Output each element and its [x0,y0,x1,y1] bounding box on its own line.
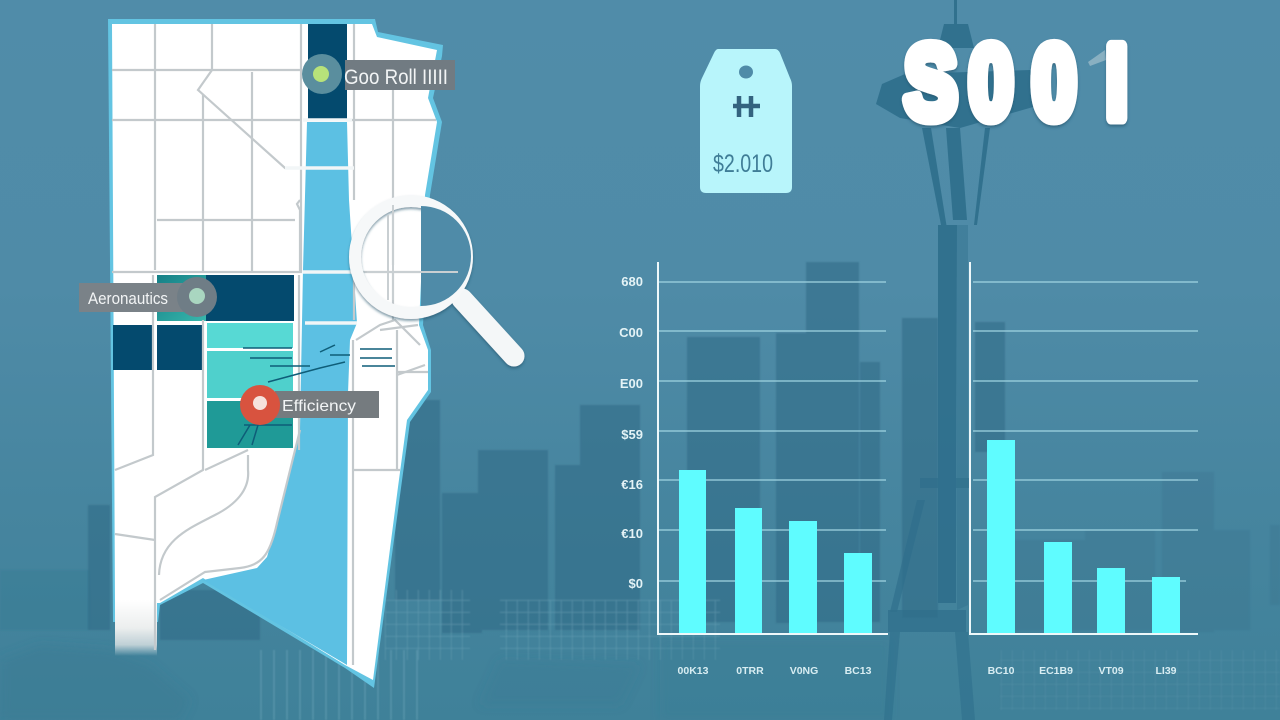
Space Needle silhouette [876,0,1106,720]
big headline: S00I [904,23,1128,141]
gridlines left [659,282,886,581]
x axis labels left: 0TRR [736,665,764,677]
tag hole [739,66,753,78]
y axis labels: C00 [619,325,643,340]
axes right [970,262,1198,634]
tag price: $2.010 [713,150,773,178]
tag hash icon [733,96,760,117]
x axis labels left [678,665,872,677]
y axis labels: $59 [621,427,643,442]
y axis labels: E00 [620,376,643,391]
white road over water [285,120,360,323]
bars right [987,440,1180,633]
map outline [108,19,443,688]
dark transit lines [238,345,395,445]
lens road lines [367,205,458,300]
axes left [658,262,888,634]
y axis labels: $0 [629,576,643,591]
label: top callout: Goo Roll IIIII [344,66,448,89]
label: red callout: Efficiency [282,398,356,415]
x axis labels right: BC10 [988,665,1015,677]
label: red callout [240,385,379,425]
bar chart left [619,262,888,677]
x axis labels right: VT09 [1098,665,1124,677]
street grid [112,24,436,665]
water channel [203,122,357,665]
y axis labels: 680 [621,274,643,289]
city skyline [0,262,1280,720]
magnifying glass [355,201,514,356]
x axis labels left: 00K13 [678,665,709,677]
x axis labels left: V0NG [790,665,818,677]
navy district top [308,24,347,119]
label: left callout [79,277,217,317]
x axis labels right: EC1B9 [1039,665,1073,677]
price tag [700,49,792,193]
fading south strip [115,600,157,656]
gridlines right [973,282,1198,581]
navy and teal districts [113,275,294,448]
y axis labels [619,274,643,591]
label: top callout [302,54,455,94]
map panel [79,19,514,688]
x axis labels left: BC13 [845,665,872,677]
x axis labels right: LI39 [1155,665,1177,677]
x axis labels right [988,665,1177,677]
foreground haze [0,640,890,720]
y axis labels: €10 [621,526,643,541]
lens water background [421,206,471,306]
map land [112,24,437,680]
label: left callout: Aeronautics [88,289,168,308]
bars left [679,470,872,633]
y axis labels: €16 [621,477,643,492]
bar chart right [970,262,1198,677]
